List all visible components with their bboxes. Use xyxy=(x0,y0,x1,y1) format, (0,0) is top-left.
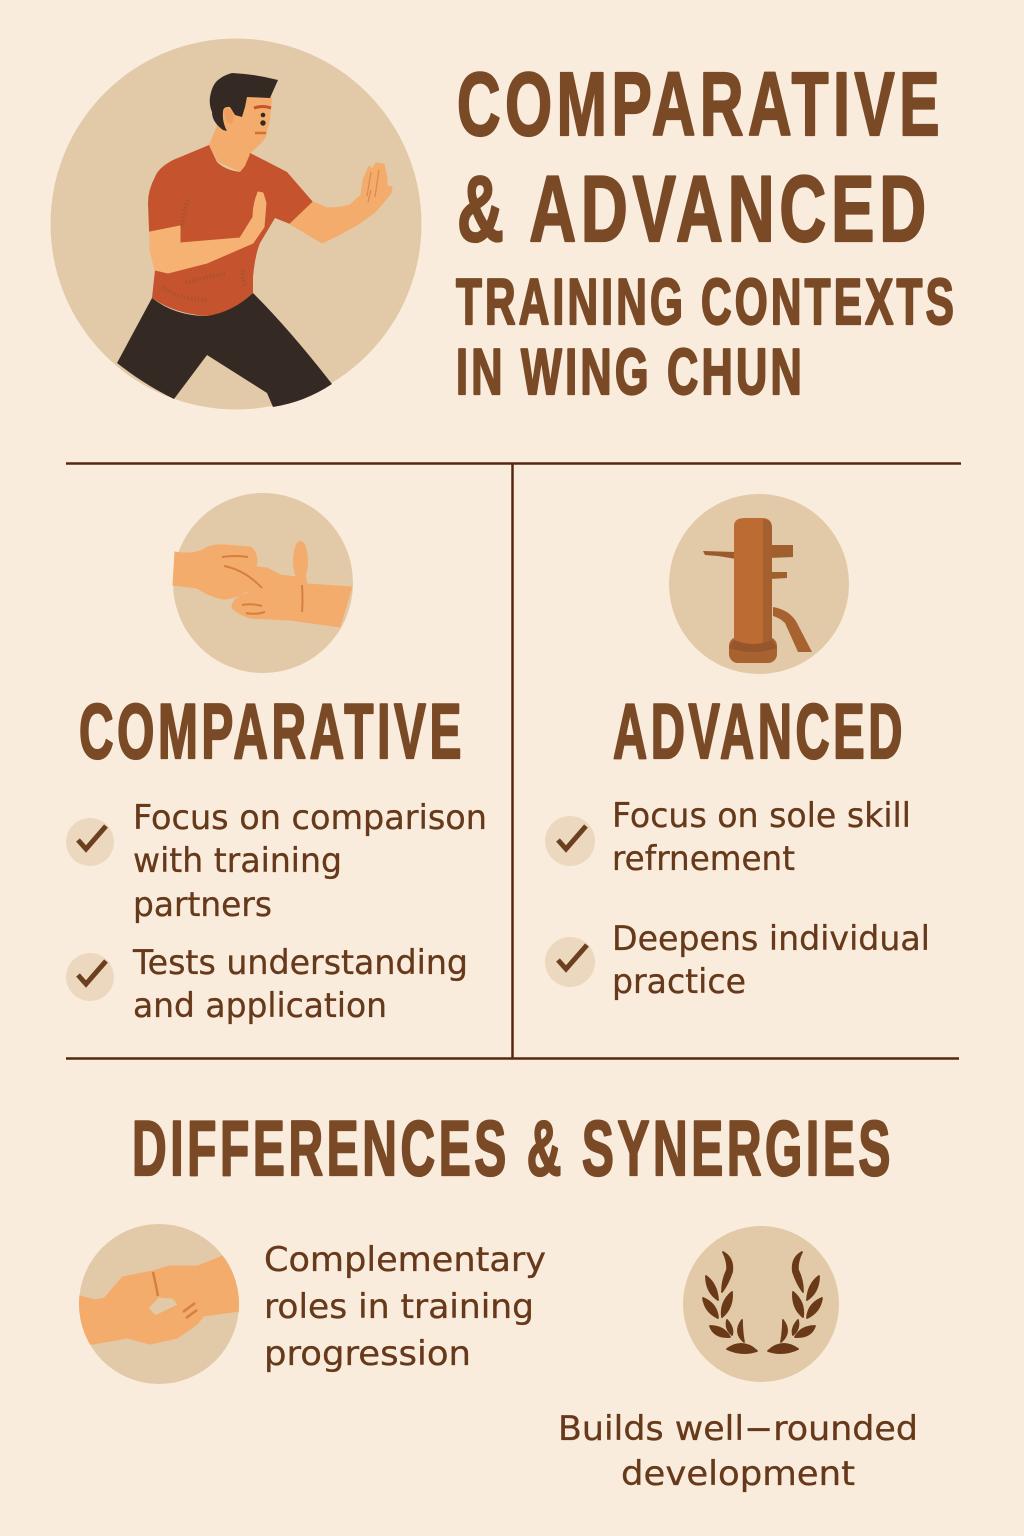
neck and face xyxy=(209,95,272,172)
panel: advanced xyxy=(545,494,930,1001)
panel: comparative xyxy=(66,493,487,1025)
item: tests understanding: Tests understanding xyxy=(132,943,468,982)
collar flap xyxy=(240,154,250,172)
title: IN WING CHUN xyxy=(456,335,805,408)
shirt xyxy=(148,145,313,316)
fabric shading xyxy=(162,200,246,300)
ear xyxy=(224,109,234,124)
text: well-rounded development: Builds well−rounded xyxy=(558,1409,918,1448)
hair xyxy=(210,73,278,131)
text: complementary roles: Complementary xyxy=(264,1240,546,1279)
legs xyxy=(117,293,332,407)
item: sole skill refinement: refrnement xyxy=(612,839,795,878)
icon: laurel wreath xyxy=(683,1226,839,1382)
rear arm and hand xyxy=(150,192,266,273)
item: tests understanding xyxy=(66,943,468,1025)
item: deepens practice xyxy=(545,919,930,1001)
item: deepens practice: practice xyxy=(612,962,746,1001)
item: sole skill refinement xyxy=(545,796,911,878)
front hand finger lines xyxy=(367,170,379,202)
heading: comparative: COMPARATIVE xyxy=(79,687,465,775)
hero illustration: wing chun practitioner xyxy=(50,38,422,410)
icon: clasped hands xyxy=(72,1224,245,1384)
item: comparison with partners xyxy=(66,798,487,924)
item: tests understanding: and application xyxy=(133,986,387,1025)
text: complementary roles: progression xyxy=(264,1334,471,1373)
text: well-rounded development xyxy=(558,1409,918,1493)
title xyxy=(456,55,957,408)
item: comparison with partners: partners xyxy=(133,885,272,924)
item: sole skill refinement: Focus on sole skill xyxy=(612,796,911,835)
text: well-rounded development: development xyxy=(621,1454,855,1493)
item: comparison with partners: Focus on comparison xyxy=(133,798,487,837)
item: deepens practice: Deepens individual xyxy=(612,919,930,958)
item: comparison with partners: with training xyxy=(133,841,342,880)
icon: wooden dummy xyxy=(669,494,849,674)
front arm and hand xyxy=(290,163,392,243)
icon: partner hands xyxy=(173,493,353,673)
text: complementary roles: roles in training xyxy=(264,1287,534,1326)
face details xyxy=(254,106,271,133)
text: complementary roles xyxy=(264,1240,546,1373)
